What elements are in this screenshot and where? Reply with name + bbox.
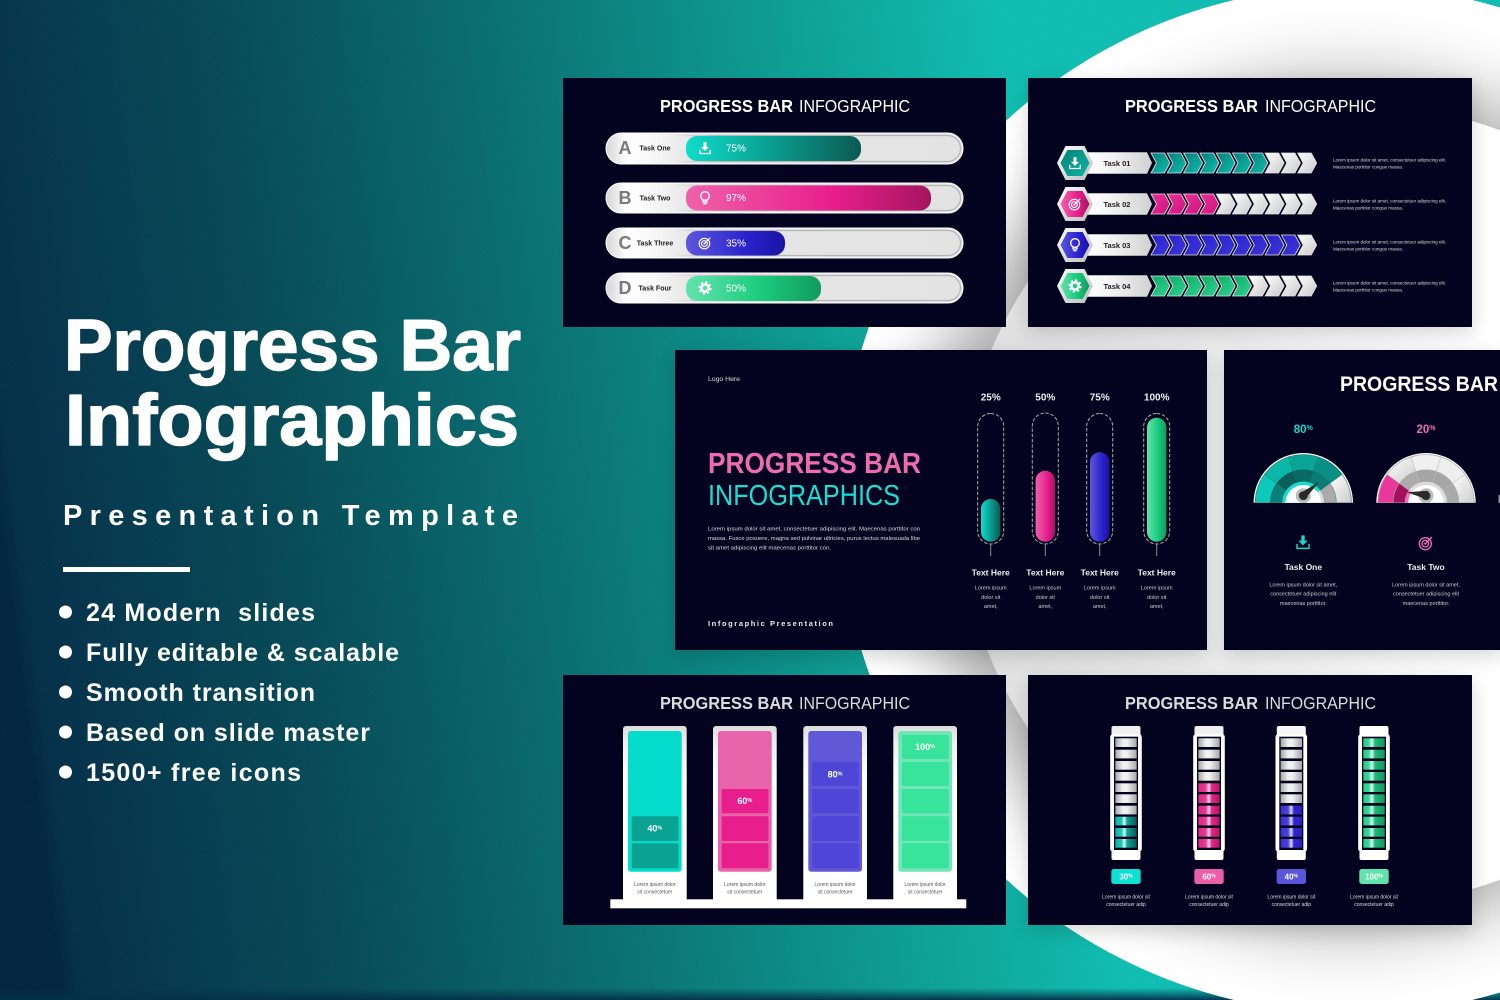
panel 1 heading: INFOGRAPHIC	[799, 96, 910, 116]
capsule 50%: amet,	[1038, 604, 1053, 610]
capsule 75%	[1081, 393, 1119, 610]
capsule 75%: amet,	[1093, 604, 1107, 610]
feature list: 1500+ free icons	[86, 759, 301, 787]
panel 3 heading	[708, 448, 921, 512]
row: Task 04: Lorem ipsum dolor sit amet, consectetuer adipiscing elit.	[1333, 280, 1446, 286]
meter 40%: %	[1294, 874, 1299, 880]
meter 100%: Lorem ipsum dolor sit	[1350, 894, 1399, 900]
capsule 50%	[1026, 393, 1065, 610]
card 80%: sit consectetuer	[818, 890, 853, 896]
meter 30%: 30	[1119, 872, 1128, 882]
capsule 100%	[1138, 393, 1176, 610]
feature list: Smooth transition	[86, 679, 315, 707]
meter 60%: %	[1211, 874, 1216, 880]
title: Infographics	[65, 381, 519, 461]
panel shadows	[675, 84, 1500, 931]
capsule 25%: amet,	[984, 604, 998, 610]
task two text: consectetuer adipiscing elit	[1393, 592, 1459, 598]
row: Task 01: Maecenas porttitor congue massa.	[1333, 164, 1403, 170]
panel: vertical capsule progress	[675, 350, 1207, 650]
card 60%: Lorem ipsum dolor	[724, 882, 766, 888]
gauge 80%: 80	[1294, 424, 1307, 436]
feature list: Based on slide master	[86, 719, 370, 747]
row: Task 04: Task 04	[1104, 282, 1131, 291]
meter 60%: 60	[1202, 872, 1211, 882]
bar C: Task Three 35%	[606, 228, 963, 258]
row: Task 01: Task 01	[1104, 159, 1130, 168]
panel: chevron progress bars	[1028, 78, 1472, 327]
meter 30%: Lorem ipsum dolor sit	[1102, 894, 1151, 900]
row: Task 01: Lorem ipsum dolor sit amet, consectetuer adipiscing elit.	[1333, 158, 1446, 162]
panel 2 heading: INFOGRAPHIC	[1265, 96, 1376, 116]
row: Task 03: Lorem ipsum dolor sit amet, consectetuer adipiscing elit.	[1333, 240, 1446, 244]
meter 100%: %	[1378, 874, 1383, 880]
meter 100%	[1350, 726, 1399, 908]
capsule 75%: dolor sit	[1090, 595, 1110, 601]
row: Task 02	[1057, 187, 1446, 221]
panel 5 heading: PROGRESS BAR	[660, 693, 793, 713]
capsule 75%: Text Here	[1081, 568, 1119, 578]
meter 40%: 40	[1285, 872, 1294, 882]
card 80%: 80	[828, 770, 838, 780]
capsule 25%: Text Here	[972, 568, 1010, 578]
bar D: Task Four 50%: 50%	[726, 284, 746, 294]
task two text: maecenas porttitor.	[1403, 601, 1450, 607]
card 100%	[893, 726, 957, 900]
capsule 100%: Lorem ipsum	[1141, 586, 1173, 592]
bar C: Task Three 35%: C	[618, 233, 632, 253]
card 60%: %	[747, 798, 752, 804]
panel 3 heading: INFOGRAPHICS	[708, 480, 900, 512]
task one text: Task One	[1284, 562, 1322, 572]
bar B: Task Two 97%: 97%	[726, 193, 746, 204]
card 40%: %	[657, 826, 662, 832]
bar C: Task Three 35%: 35%	[726, 238, 746, 250]
card 100%: %	[930, 744, 935, 750]
panel 2 heading: PROGRESS BAR	[1125, 96, 1258, 116]
meter 40%: Lorem ipsum dolor sit	[1267, 894, 1316, 900]
row: Task 02: Task 02	[1104, 200, 1130, 209]
row: Task 04	[1057, 269, 1446, 303]
panel 3 paragraph: Lorem ipsum dolor sit amet, consectetuer adipiscing elit. Maecenas porttitor con	[708, 526, 920, 532]
logo text: Logo Here	[708, 376, 740, 383]
gauge 80%	[1254, 424, 1353, 503]
title	[64, 306, 521, 461]
bar B: Task Two 97%	[606, 183, 963, 213]
card 100%: sit consectetuer	[908, 890, 943, 896]
row: Task 02: Lorem ipsum dolor sit amet, consectetuer adipiscing elit.	[1333, 198, 1446, 204]
panel 6 heading: INFOGRAPHIC	[1265, 693, 1376, 713]
bar A: Task One 75%: A	[618, 138, 632, 158]
gauge 20%: %	[1429, 425, 1436, 432]
bar A: Task One 75%: 75%	[726, 144, 746, 154]
card 40%: sit consectetuer	[637, 890, 673, 896]
panel: horizontal progress bars	[563, 78, 1006, 327]
capsule 25%: dolor sit	[981, 595, 1001, 601]
card 80%: %	[838, 772, 843, 778]
card 40%	[623, 726, 687, 900]
panel 1 heading	[660, 96, 910, 116]
task two text: Task Two	[1407, 562, 1445, 572]
card 100%: 100	[915, 742, 930, 752]
feature list: Fully editable & scalable	[86, 639, 399, 667]
capsule 25%	[972, 393, 1010, 610]
icon: target	[1419, 537, 1432, 550]
capsule 50%: dolor sit	[1036, 595, 1055, 601]
background: white circle	[839, 0, 1500, 1000]
bar B: Task Two 97%: B	[618, 188, 632, 208]
task one text: maecenas porttitor.	[1280, 601, 1327, 607]
capsule 100%: 100%	[1144, 393, 1170, 404]
row: Task 01	[1057, 146, 1446, 180]
capsule 50%: Text Here	[1026, 568, 1065, 578]
bar B: Task Two 97%: Task Two	[640, 196, 670, 202]
bar C: Task Three 35%: Task Three	[637, 240, 673, 248]
task one text	[1269, 562, 1338, 607]
row: Task 04: Maecenas porttitor congue massa.	[1333, 288, 1403, 292]
capsule 25%: Lorem ipsum	[975, 586, 1007, 592]
panel 6 heading	[1125, 693, 1376, 713]
title: Progress Bar	[64, 306, 521, 386]
meter 30%	[1102, 726, 1151, 908]
bar A: Task One 75%	[606, 133, 963, 164]
meter 30%: consectetuer adip	[1106, 902, 1146, 908]
feature list	[59, 599, 399, 787]
task one text: Lorem ipsum dolor sit amet,	[1269, 582, 1338, 588]
sliver of third gauge at right edge	[1498, 495, 1500, 503]
icon: download	[1297, 535, 1309, 548]
divider rule	[63, 567, 190, 572]
meter 60%	[1185, 726, 1234, 908]
gauge 20%	[1376, 424, 1476, 503]
gauge 20%: 20	[1416, 424, 1429, 436]
panel: battery meters	[1028, 675, 1472, 925]
card 60%: 60	[737, 796, 747, 806]
capsule 50%: 50%	[1035, 393, 1055, 404]
feature list: 24 Modern slides	[86, 599, 315, 627]
meter 100%: 100	[1365, 872, 1378, 882]
panel 3 paragraph: massa. Fusce posuere, magna sed pulvinar ultricies, purus lectus malesuada libe	[708, 536, 920, 542]
panel 2 heading	[1125, 96, 1376, 116]
panel: gauges	[1224, 350, 1500, 650]
task two text	[1392, 562, 1460, 607]
card 60%	[713, 726, 777, 900]
capsule 75%: 75%	[1090, 393, 1110, 404]
card 60%: sit consectetuer	[727, 890, 763, 896]
subtitle: Presentation Template	[63, 500, 518, 532]
capsule 50%: Lorem ipsum	[1029, 586, 1062, 592]
panel 1 heading: PROGRESS BAR	[660, 96, 793, 116]
capsule 25%: 25%	[981, 393, 1001, 404]
meter 30%: %	[1128, 874, 1133, 880]
capsule 100%: amet,	[1150, 604, 1164, 610]
capsule 100%: Text Here	[1138, 568, 1176, 578]
panel 5 heading: INFOGRAPHIC	[799, 693, 910, 713]
card 100%: Lorem ipsum dolor	[904, 882, 946, 888]
meter 60%: Lorem ipsum dolor sit	[1185, 894, 1234, 900]
bar D: Task Four 50%	[606, 273, 963, 303]
task one text: consectetuer adipiscing elit	[1270, 592, 1337, 598]
bar D: Task Four 50%: D	[618, 278, 632, 298]
panel 5 heading	[660, 693, 910, 713]
footer label: Infographic Presentation	[708, 619, 833, 628]
panel: column cards	[563, 675, 1006, 925]
row: Task 03: Maecenas porttitor congue massa.	[1333, 246, 1403, 252]
meter 40%	[1267, 726, 1316, 908]
bar A: Task One 75%: Task One	[640, 146, 671, 152]
panel 3 heading: PROGRESS BAR	[708, 448, 921, 480]
gauge 80%: %	[1307, 425, 1314, 432]
base shelf	[610, 899, 966, 908]
card 40%: Lorem ipsum dolor	[634, 882, 676, 888]
task two text: Lorem ipsum dolor sit amet,	[1392, 582, 1460, 588]
meter 40%: consectetuer adip	[1272, 902, 1311, 908]
meter 100%: consectetuer adip	[1354, 902, 1394, 908]
card 80%	[803, 726, 867, 900]
panel 6 heading: PROGRESS BAR	[1125, 693, 1258, 713]
panel 3 paragraph: sit amet adipiscing elit maecenas porttitor con.	[708, 545, 832, 551]
capsule 100%: dolor sit	[1147, 595, 1167, 601]
card 80%: Lorem ipsum dolor	[814, 882, 856, 888]
card 40%: 40	[647, 824, 657, 834]
row: Task 03: Task 03	[1104, 241, 1130, 250]
meter 60%: consectetuer adip	[1189, 902, 1229, 908]
bar D: Task Four 50%: Task Four	[639, 286, 672, 292]
row: Task 02: Maecenas porttitor congue massa.	[1333, 206, 1403, 210]
panel 3 paragraph	[708, 526, 920, 551]
row: Task 03	[1057, 228, 1446, 262]
capsule 75%: Lorem ipsum	[1084, 586, 1116, 592]
